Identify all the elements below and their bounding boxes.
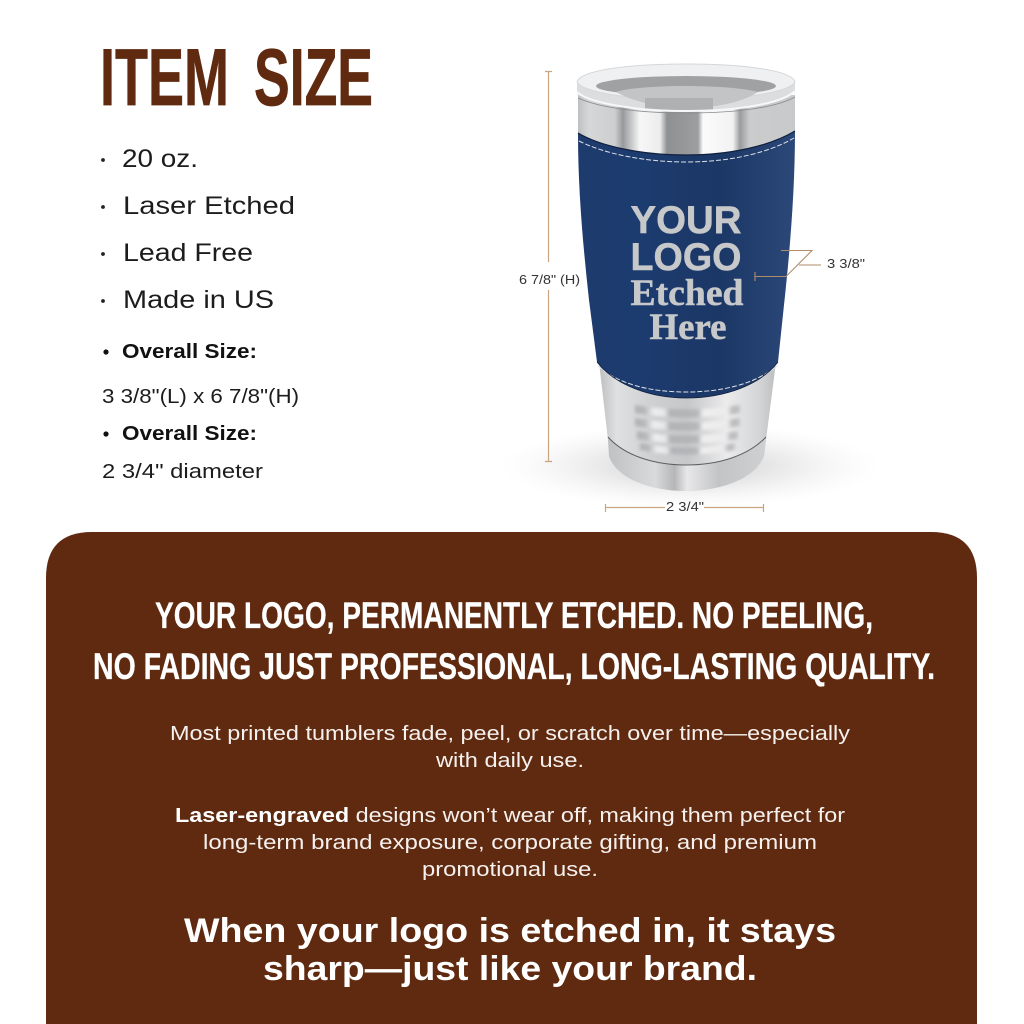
title: SIZE [254,33,373,123]
overall size: diameter: Overall Size: [122,423,257,445]
panel paragraph: laser engraved [175,804,845,881]
ribbed highlights [635,405,740,454]
bullet: made in US: Made in US [123,286,274,314]
dimension: width: 3 3/8" [827,257,865,271]
bullet: lead free: Lead Free [123,239,253,267]
dimension: width [755,250,865,281]
lid [577,64,795,113]
panel paragraph: laser engraved: long-term brand exposure, corporate gifting, and premium [203,831,817,854]
bullet: laser etched: Laser Etched [123,192,295,220]
panel: brown message panel [46,532,977,1024]
panel paragraph: laser engraved: promotional use. [422,858,598,881]
panel heading [93,595,935,687]
etched logo text [630,199,744,348]
tumbler illustration [500,64,880,508]
navy leather sleeve [578,131,795,398]
overall size: diameter: 2 3/4" diameter [102,461,263,483]
floor shadow [500,424,880,508]
dimension: height: 6 7/8" (H) [519,273,580,287]
etched logo text: Here [650,307,726,348]
panel paragraph: laser engraved: Laser-engraved designs won’t wear off, making them perfect for [175,804,845,827]
lower steel body [599,362,776,491]
dimension: diameter [606,500,764,514]
title: ITEM [100,33,229,123]
etched logo text: Etched [630,273,744,314]
dimension: height [519,71,580,462]
panel closing statement: When your logo is etched in, it stays [184,912,836,950]
dimension: diameter: 2 3/4" [666,500,704,514]
overall size: length and height: Overall Size: [122,341,257,363]
panel paragraph: fading: Most printed tumblers fade, peel, or scratch over time—especially [170,722,851,745]
overall size: diameter [102,423,263,483]
panel paragraph: fading [170,722,851,772]
etched logo text: LOGO [630,236,742,279]
panel closing statement: sharp—just like your brand. [263,950,757,988]
bullet: 20 oz.: 20 oz. [122,145,198,173]
feature list [101,145,295,314]
upper steel band [578,95,795,155]
overall size: length and height [102,341,299,408]
panel closing statement [184,912,836,988]
panel paragraph: fading: with daily use. [435,749,584,772]
overall size: length and height: 3 3/8"(L) x 6 7/8"(H) [102,386,299,408]
etched logo text: YOUR [630,199,742,242]
